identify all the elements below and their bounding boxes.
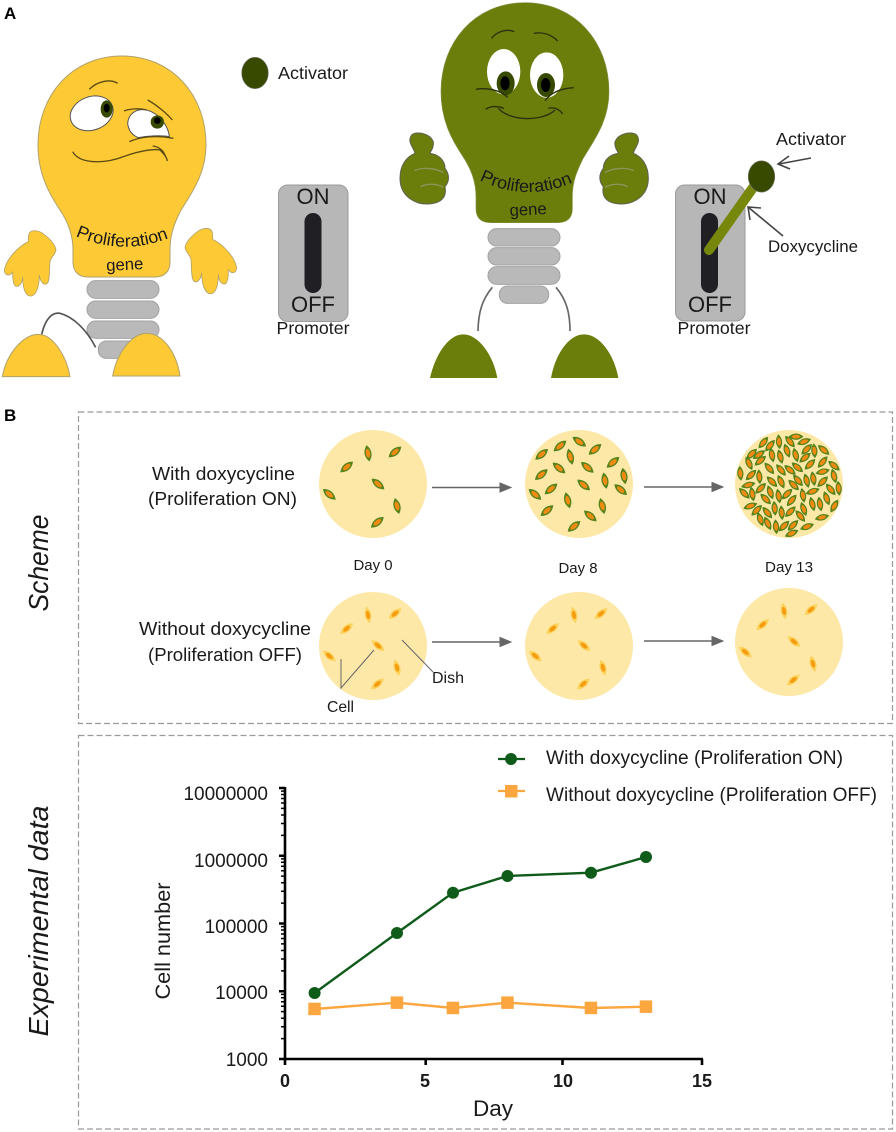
y tick labels: 10000000 bbox=[183, 784, 268, 805]
scheme side heading: Scheme bbox=[23, 514, 54, 612]
arrow bbox=[644, 482, 723, 492]
cell and dish callouts: Cell bbox=[327, 699, 354, 716]
x axis bbox=[284, 1059, 703, 1065]
promoter switch on with doxycycline lever: Promoter bbox=[678, 318, 751, 338]
dish: day 0 with doxycycline bbox=[319, 430, 427, 538]
activator label and arrow bbox=[776, 129, 846, 169]
day labels: Day 0 bbox=[354, 557, 392, 574]
x tick labels: 0 bbox=[280, 1071, 290, 1091]
panel: scheme bbox=[23, 412, 892, 724]
row label: with doxycycline bbox=[148, 463, 297, 509]
feet bbox=[2, 333, 180, 377]
bulb body bbox=[441, 3, 609, 223]
thumbs-up hands bbox=[400, 133, 648, 204]
row label: without doxycycline: (Proliferation OFF) bbox=[148, 644, 302, 665]
promoter switch on with doxycycline lever: OFF bbox=[688, 292, 732, 317]
arrow bbox=[432, 638, 511, 646]
sceptical face bbox=[65, 81, 173, 162]
activator on lever bbox=[748, 161, 775, 192]
panel label A: A bbox=[4, 4, 16, 23]
x tick labels bbox=[280, 1071, 712, 1091]
feet bbox=[430, 334, 618, 378]
panel label B: B bbox=[4, 406, 16, 425]
promoter switch off: OFF bbox=[291, 292, 335, 317]
activator label and arrow: Activator bbox=[776, 129, 846, 149]
arrow bbox=[432, 483, 511, 492]
bulb label bbox=[480, 170, 572, 220]
bulb screw base bbox=[488, 229, 560, 303]
green lightbulb character: proliferation gene on bbox=[400, 2, 649, 378]
line chart: cell number over days bbox=[152, 784, 712, 1121]
row label: without doxycycline: Without doxycycline bbox=[139, 618, 311, 639]
cell and dish callouts bbox=[327, 640, 464, 716]
arrow bbox=[644, 636, 723, 646]
row label: without doxycycline bbox=[139, 618, 311, 665]
y tick labels: 100000 bbox=[205, 917, 268, 938]
legend: activator bbox=[242, 57, 348, 89]
day labels: Day 13 bbox=[765, 559, 813, 576]
day labels: Day 8 bbox=[558, 560, 598, 577]
y axis title: Cell number bbox=[152, 882, 175, 1000]
bulb label bbox=[76, 226, 168, 275]
promoter switch on with doxycycline lever: ON bbox=[694, 184, 726, 209]
row label: with doxycycline: With doxycycline bbox=[152, 463, 295, 484]
promoter switch off: ON bbox=[296, 184, 330, 209]
row label: with doxycycline: (Proliferation ON) bbox=[148, 488, 297, 509]
series: with doxycycline bbox=[309, 851, 652, 999]
happy face bbox=[476, 30, 574, 119]
bulb label: Proliferation bbox=[480, 170, 572, 192]
dish: day 13 without doxycycline bbox=[735, 588, 843, 696]
legend: activator: Activator bbox=[278, 63, 348, 83]
dish: day 0 without doxycycline bbox=[319, 592, 427, 700]
chart legend: With doxycycline (Proliferation ON) bbox=[546, 748, 843, 769]
doxycycline label and arrow: Doxycycline bbox=[768, 237, 858, 256]
legs bbox=[478, 287, 570, 331]
promoter switch off bbox=[276, 184, 350, 338]
y axis with log ticks bbox=[279, 787, 285, 1060]
x tick labels: 10 bbox=[553, 1071, 573, 1091]
chart legend: Without doxycycline (Proliferation OFF) bbox=[546, 785, 877, 806]
bulb label: Proliferation bbox=[76, 226, 168, 247]
bulb screw base bbox=[87, 281, 159, 358]
bent leg bbox=[42, 313, 96, 347]
doxycycline lever bbox=[709, 182, 757, 250]
x tick labels: 15 bbox=[692, 1071, 712, 1091]
experimental data side heading: Experimental data bbox=[23, 806, 54, 1036]
promoter switch off: Promoter bbox=[276, 318, 350, 338]
hands bbox=[4, 228, 237, 296]
bulb label: gene bbox=[106, 254, 144, 275]
bulb body bbox=[38, 56, 206, 277]
y tick labels: 10000 bbox=[215, 983, 268, 1004]
dish: day 8 with doxycycline bbox=[525, 430, 633, 538]
y tick labels: 1000 bbox=[226, 1050, 268, 1071]
y tick labels: 1000000 bbox=[194, 851, 268, 872]
dish: day 13 with doxycycline bbox=[735, 430, 843, 539]
x tick labels: 5 bbox=[420, 1071, 430, 1091]
day labels bbox=[354, 557, 813, 577]
bulb label: gene bbox=[509, 199, 547, 220]
promoter switch on with doxycycline lever bbox=[676, 129, 858, 338]
panel: experimental data bbox=[23, 736, 892, 1129]
cell and dish callouts: Dish bbox=[432, 670, 464, 687]
doxycycline label and arrow bbox=[748, 207, 858, 256]
dish: day 8 without doxycycline bbox=[525, 592, 633, 700]
yellow lightbulb character: proliferation gene off bbox=[2, 56, 238, 378]
chart legend bbox=[498, 748, 877, 806]
y tick labels bbox=[183, 784, 268, 1071]
series: without doxycycline bbox=[308, 996, 652, 1015]
x axis title: Day bbox=[473, 1096, 513, 1121]
